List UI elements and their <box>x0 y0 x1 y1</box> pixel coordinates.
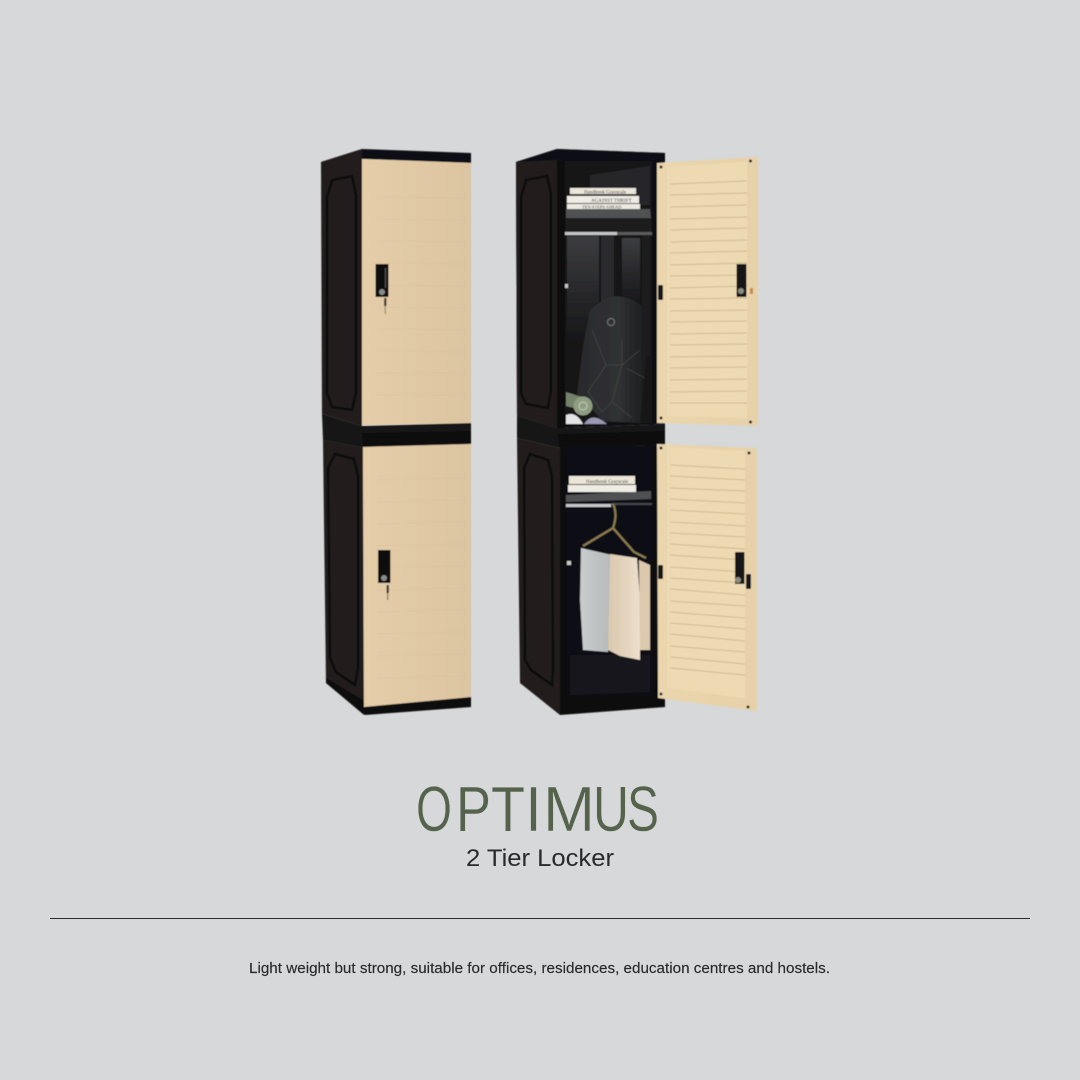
door lock <box>736 264 746 297</box>
interior <box>565 161 652 423</box>
side panel lower <box>328 454 358 685</box>
closed locker: lower lock and key <box>378 550 390 600</box>
closed locker: lower door <box>363 444 471 707</box>
rail <box>566 504 611 507</box>
subtitle: 2 Tier Locker <box>466 845 614 872</box>
title: S <box>627 773 659 845</box>
side panel <box>524 454 553 685</box>
lower open door <box>657 444 757 711</box>
title <box>416 773 659 845</box>
door latch slot <box>658 285 663 300</box>
hanger <box>583 504 646 558</box>
title: O <box>416 773 452 845</box>
title: M <box>543 773 595 845</box>
closed locker: upper lock and key <box>376 264 388 314</box>
open locker: lower tier <box>517 416 757 715</box>
locker: open two-tier <box>516 149 758 715</box>
side latch marker <box>565 284 568 288</box>
books: Handbook Grayscale <box>586 480 629 485</box>
books: TEN STEPS AHEAD <box>582 204 622 210</box>
title: U <box>593 773 629 845</box>
closed locker: upper tier body <box>321 149 471 447</box>
locker: closed two-tier <box>321 149 471 715</box>
backpack <box>577 296 648 423</box>
interior <box>566 446 653 696</box>
upper open door <box>657 157 758 426</box>
shelf <box>566 491 651 502</box>
side panel upper <box>327 176 356 410</box>
books <box>567 188 640 210</box>
side panel <box>521 176 551 408</box>
hanging rail <box>565 232 617 235</box>
title: I <box>525 773 542 845</box>
books: AGAINST THRIFT <box>591 199 632 204</box>
title: T <box>491 773 525 845</box>
books <box>568 476 636 492</box>
books: Handbook Grayscale <box>584 190 627 196</box>
door lock <box>735 552 744 584</box>
closed locker: upper door <box>362 159 471 425</box>
open locker: upper tier <box>516 149 758 428</box>
rolled towels <box>566 392 607 424</box>
side latch marker <box>567 561 571 565</box>
towels <box>580 548 650 660</box>
closed locker: lower tier body <box>323 440 471 715</box>
divider line <box>50 918 1030 920</box>
title: P <box>456 773 491 845</box>
shelf <box>566 209 651 218</box>
door latch slot <box>658 565 663 579</box>
description: Light weight but strong, suitable for offices, residences, education centres and hostels. <box>249 961 830 977</box>
